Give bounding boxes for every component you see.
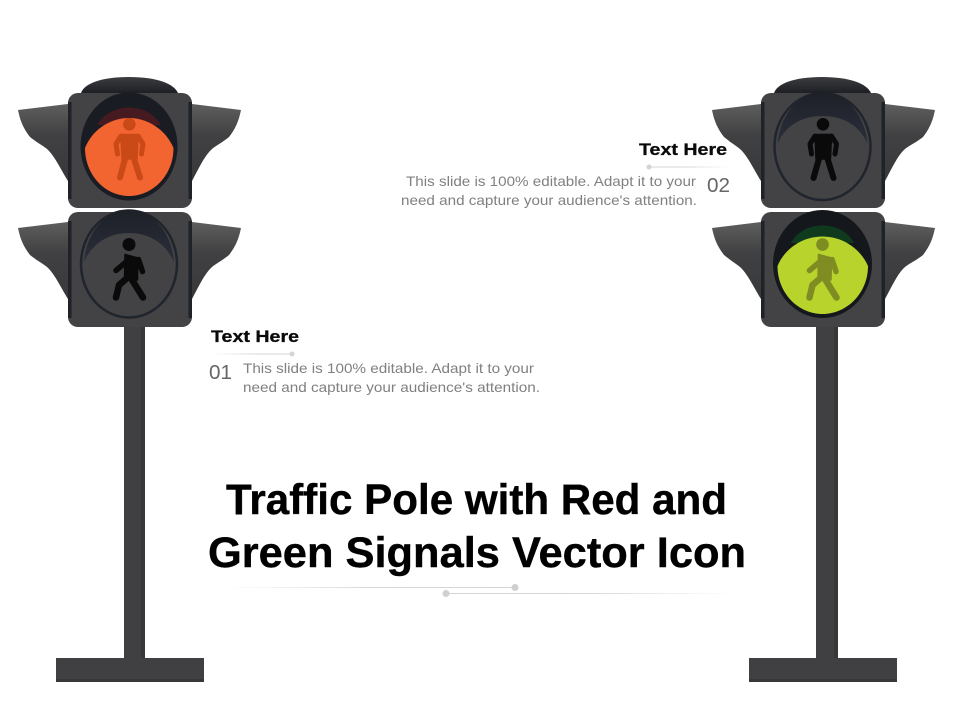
green walking figure bbox=[810, 238, 836, 298]
title divider with dots bbox=[225, 584, 735, 597]
callout 01 body: need and capture your audience's attention. bbox=[243, 379, 540, 395]
left upper signal: red pedestrian bbox=[18, 77, 241, 208]
callout 02 heading: Text Here bbox=[639, 140, 727, 159]
title: Traffic Pole with Red and bbox=[226, 476, 727, 524]
callout 01 connector bbox=[209, 352, 294, 356]
callout 02 bbox=[401, 140, 731, 208]
right upper signal: off standing figure bbox=[712, 77, 935, 208]
callout 01 number: 01 bbox=[209, 362, 232, 384]
black standing figure bbox=[810, 118, 836, 178]
callout 01 heading: Text Here bbox=[211, 327, 299, 346]
callout 02 body: need and capture your audience's attention. bbox=[401, 192, 697, 208]
callout 01 bbox=[209, 327, 540, 395]
red figure bbox=[116, 118, 143, 178]
right pole shaft bbox=[816, 320, 838, 660]
callout 02 connector bbox=[646, 164, 731, 170]
left pole base bbox=[56, 658, 204, 682]
callout 02 number: 02 bbox=[707, 175, 730, 197]
right traffic pole bbox=[712, 77, 935, 682]
callout 01 body: This slide is 100% editable. Adapt it to your bbox=[243, 360, 534, 376]
title: Green Signals Vector Icon bbox=[208, 529, 746, 577]
left lower signal: off walking figure bbox=[18, 210, 241, 327]
black walking figure bbox=[116, 238, 143, 298]
callout 02 body: This slide is 100% editable. Adapt it to your bbox=[406, 173, 696, 189]
right pole base bbox=[749, 658, 897, 682]
left traffic pole bbox=[18, 77, 241, 682]
left pole shaft bbox=[124, 320, 145, 660]
right lower signal: green pedestrian bbox=[712, 210, 935, 327]
